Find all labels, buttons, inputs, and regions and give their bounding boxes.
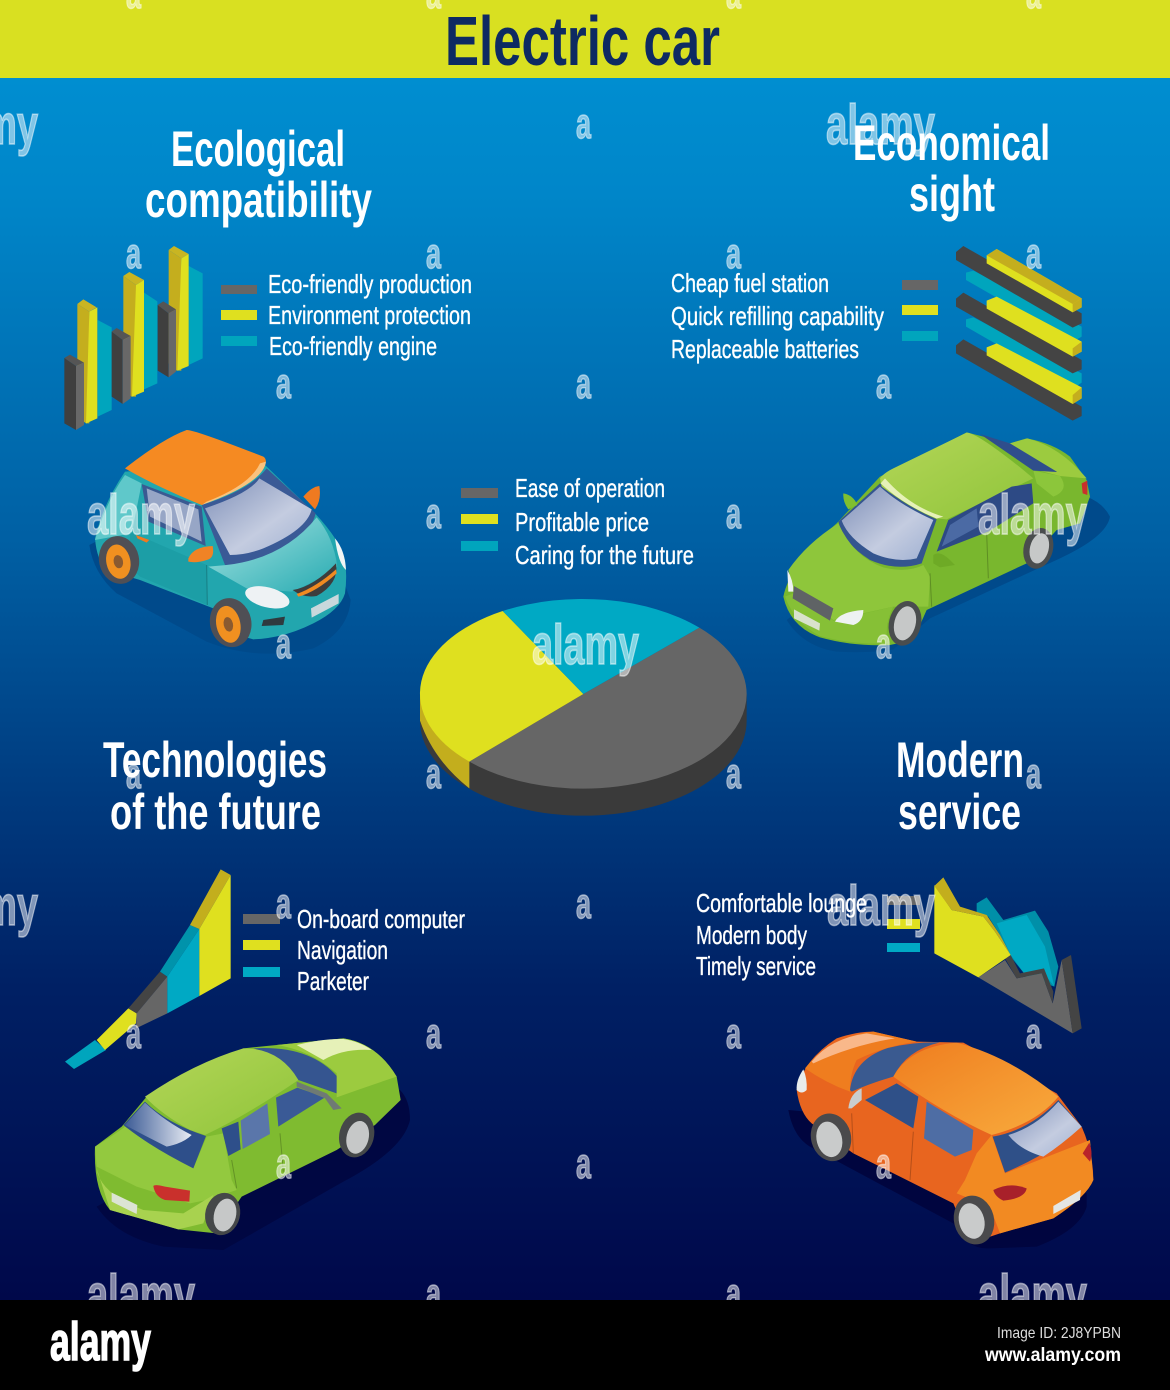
legend: modern service: Comfortable lounge xyxy=(696,888,867,918)
watermark pattern: a xyxy=(276,620,292,668)
watermark pattern: a xyxy=(126,1010,142,1058)
bar chart: isometric columns xyxy=(64,246,203,430)
watermark pattern: alamy xyxy=(978,483,1087,547)
watermark pattern: a xyxy=(1026,230,1042,278)
watermark pattern: a xyxy=(876,620,892,668)
legend: economical: Cheap fuel station xyxy=(671,268,829,298)
legend: ecological xyxy=(221,269,472,361)
car: orange hatchback rear view xyxy=(788,1032,1093,1249)
heading: technologies of the future: of the future xyxy=(110,784,321,840)
footer logo: alamy xyxy=(50,1312,151,1372)
header banner xyxy=(0,0,1170,80)
area chart: falling xyxy=(934,877,1082,1033)
watermark pattern: a xyxy=(726,750,742,798)
footer bar xyxy=(0,1300,1170,1390)
heading: modern service: Modern xyxy=(896,732,1024,788)
heading: ecological compatibility: compatibility xyxy=(145,172,372,228)
watermark pattern: a xyxy=(576,100,592,148)
watermark pattern: a xyxy=(576,880,592,928)
watermark pattern: a xyxy=(126,750,142,798)
pie chart xyxy=(420,599,747,816)
legend: economical: Quick refilling capability xyxy=(671,301,884,331)
watermark pattern: a xyxy=(426,750,442,798)
legend: center: Profitable price xyxy=(515,507,649,537)
heading: economical sight: sight xyxy=(909,166,995,222)
watermark pattern: a xyxy=(726,1010,742,1058)
watermark pattern: a xyxy=(426,1010,442,1058)
heading: technologies of the future: Technologies xyxy=(103,732,327,788)
heading: ecological compatibility xyxy=(145,121,372,228)
watermark pattern: a xyxy=(426,1270,442,1318)
legend: technologies xyxy=(243,904,465,996)
legend: technologies: Parketer xyxy=(297,966,369,996)
legend: technologies: On-board computer xyxy=(297,904,465,934)
watermark pattern: a xyxy=(576,1140,592,1188)
watermark pattern: a xyxy=(876,360,892,408)
bar chart: isometric horizontal bars xyxy=(956,246,1082,421)
legend: center xyxy=(461,473,694,570)
car: teal hatchback with orange roof xyxy=(89,430,351,654)
watermark pattern: a xyxy=(876,1140,892,1188)
legend: center: Caring for the future xyxy=(515,540,694,570)
car: green sedan rear view xyxy=(95,1038,410,1250)
heading: modern service: service xyxy=(898,784,1021,840)
watermark pattern: a xyxy=(276,360,292,408)
panel: technologies of the future xyxy=(65,732,465,1250)
image id: Image ID: 2J8YPBN xyxy=(997,1325,1121,1342)
watermark pattern: alamy xyxy=(827,874,935,938)
heading: modern service xyxy=(896,732,1024,840)
area chart: rising xyxy=(65,869,231,1069)
watermark pattern: a xyxy=(126,230,142,278)
legend: economical xyxy=(671,268,938,364)
panel: modern service xyxy=(696,732,1093,1249)
car: green sedan xyxy=(783,432,1110,652)
legend: modern service: Modern body xyxy=(696,920,807,950)
title: Electric car xyxy=(445,2,720,80)
watermark pattern: a xyxy=(1026,750,1042,798)
heading: technologies of the future xyxy=(103,732,327,840)
watermark pattern: a xyxy=(726,1270,742,1318)
watermark pattern: a xyxy=(276,1140,292,1188)
heading: economical sight: Economical xyxy=(853,115,1050,171)
legend: modern service xyxy=(696,888,920,981)
legend: ecological: Environment protection xyxy=(268,300,471,330)
legend: economical: Replaceable batteries xyxy=(671,334,859,364)
heading: ecological compatibility: Ecological xyxy=(171,121,345,177)
watermark pattern: alamy xyxy=(87,483,195,547)
legend: modern service: Timely service xyxy=(696,951,816,981)
heading: economical sight xyxy=(853,115,1050,222)
panel: ecological compatibility xyxy=(64,121,472,654)
watermark pattern: alamy xyxy=(87,1263,195,1327)
legend: technologies: Navigation xyxy=(297,935,388,965)
watermark pattern: a xyxy=(1026,1010,1042,1058)
legend: ecological: Eco-friendly production xyxy=(268,269,472,299)
watermark pattern: alamy xyxy=(978,1263,1087,1327)
website: www.alamy.com xyxy=(984,1345,1121,1366)
panel: center pie chart xyxy=(420,473,747,816)
legend: ecological: Eco-friendly engine xyxy=(269,331,437,361)
panel: economical sight xyxy=(671,115,1110,652)
watermark pattern: a xyxy=(726,230,742,278)
watermark pattern: a xyxy=(426,490,442,538)
watermark pattern: a xyxy=(576,360,592,408)
watermark pattern: a xyxy=(726,490,742,538)
watermark pattern: a xyxy=(276,880,292,928)
legend: center: Ease of operation xyxy=(515,473,665,503)
watermark pattern: alamy xyxy=(826,93,935,157)
watermark pattern: a xyxy=(426,230,442,278)
watermark pattern: alamy xyxy=(532,613,639,677)
